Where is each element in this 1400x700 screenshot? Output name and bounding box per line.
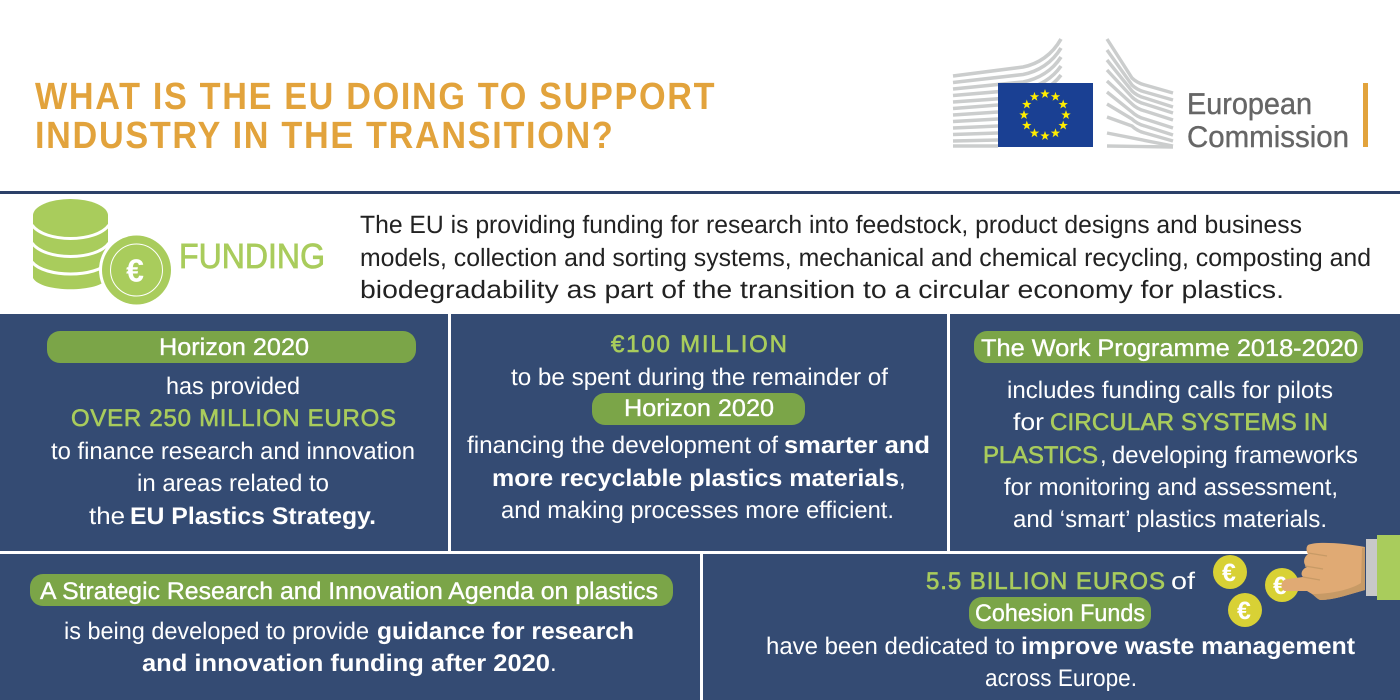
panel body text — [51, 373, 415, 530]
panel body text: for monitoring and assessment, — [1004, 474, 1338, 501]
panel body text: has provided — [166, 373, 300, 400]
highlight: 5.5 billion euros: 5.5 BILLION EUROS — [926, 568, 1165, 595]
icon: euro coins: € — [1237, 597, 1251, 625]
pill: Horizon 2020: Horizon 2020 — [159, 334, 309, 361]
panel body text: is being developed to provide — [64, 618, 369, 645]
text: remainder: to be spent during the remainder of — [511, 364, 888, 391]
pill: Horizon 2020: Horizon 2020 — [624, 395, 774, 422]
title — [35, 76, 714, 157]
panel body text: in areas related to — [137, 470, 329, 497]
panel: cohesion funds — [766, 568, 1355, 692]
icon: coin stack — [32, 199, 174, 308]
header rule — [0, 191, 1400, 194]
panel: Horizon 2020 funding — [47, 331, 416, 530]
panel body text — [64, 618, 634, 677]
icon: right building — [1107, 39, 1173, 147]
panel body text — [467, 432, 930, 524]
panel body text: developing frameworks — [1112, 442, 1358, 469]
icon: coin stack: € — [126, 252, 144, 288]
panel body text: , — [899, 465, 906, 492]
pill: The Work Programme 2018-2020: The Work Programme 2018-2020 — [981, 335, 1358, 362]
panel body text: and innovation funding after 2020 — [142, 650, 550, 677]
panel body text: have been dedicated to — [766, 633, 1015, 660]
intro text: models, collection and sorting systems, mechanical and chemical recycling, composting and — [360, 244, 1371, 272]
panel body text: to finance research and innovation — [51, 438, 415, 465]
panel body text: and ‘smart’ plastics materials. — [1013, 506, 1327, 533]
panel body text: EU Plastics Strategy. — [130, 503, 376, 530]
panel body text: PLASTICS — [983, 442, 1098, 469]
panel body text: more recyclable plastics materials — [492, 465, 899, 492]
icon: euro coins — [1213, 555, 1299, 627]
panel body text: . — [550, 650, 557, 677]
panel body text: smarter and — [784, 432, 930, 459]
icon: euro coins: € — [1222, 559, 1236, 587]
icon: euro coins: € — [1273, 572, 1287, 600]
panel body text: and making processes more efficient. — [501, 497, 894, 524]
panel body text: for — [1013, 409, 1044, 436]
pill: Horizon 2020 — [47, 331, 416, 363]
pill: Horizon 2020 — [592, 393, 805, 425]
panel body text: includes funding calls for pilots — [1007, 377, 1333, 404]
panel body text: the — [89, 503, 125, 530]
highlight: 100 million: €100 MILLION — [611, 331, 787, 358]
logo wordmark: Commission — [1187, 121, 1349, 154]
panel body text — [766, 633, 1355, 692]
heading: funding: FUNDING — [179, 237, 325, 276]
European Commission logo — [953, 39, 1349, 154]
intro text: The EU is providing funding for research into feedstock, product designs and business — [360, 211, 1302, 239]
panel body text: financing the development of — [467, 432, 778, 459]
title: INDUSTRY IN THE TRANSITION? — [35, 115, 613, 157]
title: WHAT IS THE EU DOING TO SUPPORT — [35, 76, 715, 118]
logo wordmark: European — [1187, 88, 1312, 121]
intro text — [360, 211, 1371, 304]
panel body text — [983, 377, 1358, 533]
highlight: 5.5 billion euros: of — [1171, 568, 1195, 595]
panel body text: , — [1100, 442, 1107, 469]
panel body text: improve waste management — [1021, 633, 1355, 660]
panel: research agenda — [30, 574, 673, 677]
icon: left building — [953, 39, 1061, 146]
orange logo bar — [1363, 83, 1368, 147]
pill: Cohesion Funds: Cohesion Funds — [975, 600, 1145, 627]
pill: Strategic Research and Innovation Agenda: A Strategic Research and Innovation Agenda on plastics — [40, 578, 658, 605]
panel body text: OVER 250 MILLION EUROS — [71, 405, 396, 432]
navy background — [0, 314, 1400, 700]
icon: pointing hand — [1281, 535, 1400, 600]
panel body text: guidance for research — [377, 618, 634, 645]
panel: Work Programme — [974, 331, 1363, 533]
intro text: biodegradability as part of the transition to a circular economy for plastics. — [360, 276, 1284, 304]
panel body text: across Europe. — [985, 665, 1137, 692]
logo wordmark — [1187, 88, 1349, 154]
icon: EU flag — [998, 83, 1093, 147]
panel: 100 million — [467, 331, 930, 524]
panel body text: CIRCULAR SYSTEMS IN — [1050, 409, 1328, 436]
